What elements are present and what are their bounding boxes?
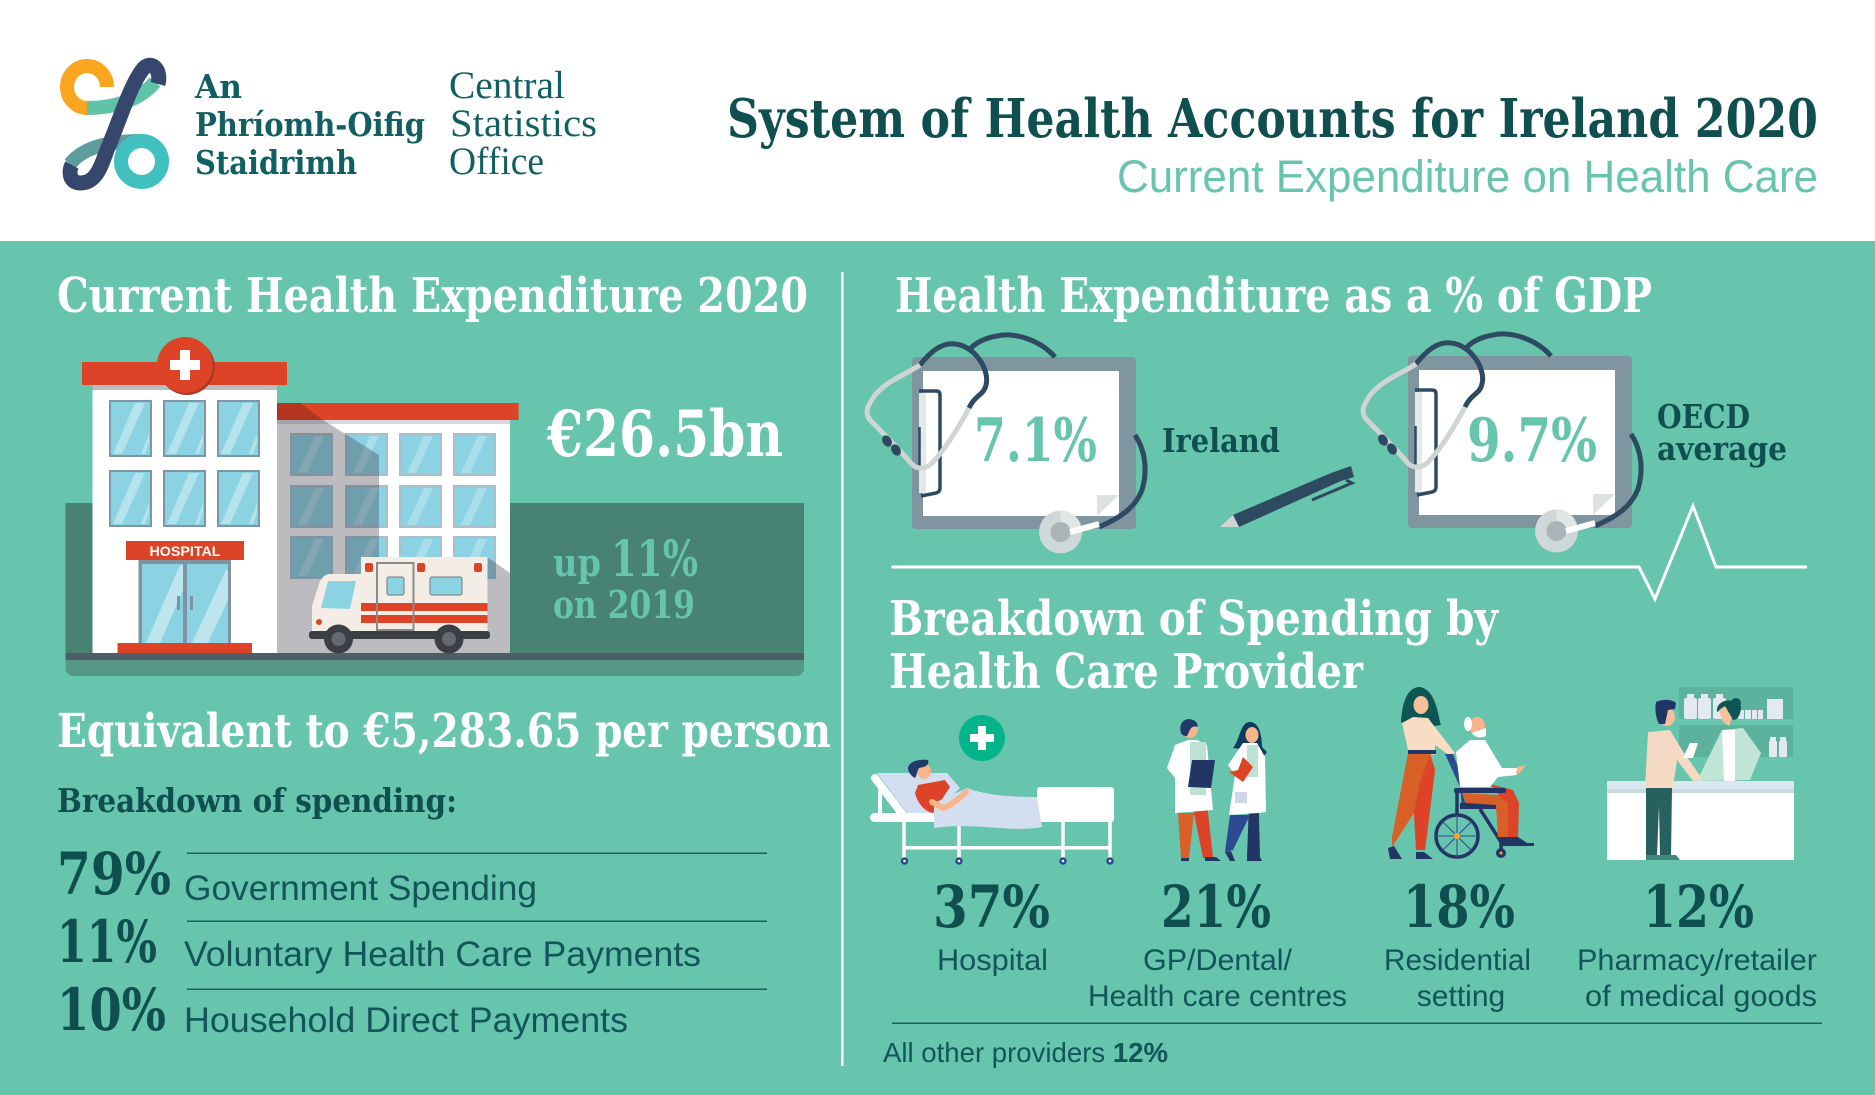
icon: clipboard Ireland [867, 335, 1145, 554]
provider: GP, dental, health care centres [1088, 719, 1347, 1013]
icon: carer and wheelchair [1388, 687, 1534, 859]
item: household payments [57, 976, 628, 1044]
page background [0, 0, 1875, 241]
icon: pharmacy counter [1607, 687, 1794, 860]
note: all other providers: All other providers 12% [883, 1037, 1168, 1068]
figure: up 11% on 2019: on 2019 [553, 582, 695, 627]
icon: doctors [1167, 719, 1267, 861]
list: breakdown of spending [57, 840, 767, 1044]
illustration: hospital and ambulance [66, 337, 804, 676]
logo: Central Statistics Office [67, 64, 597, 183]
item: voluntary payments [57, 908, 701, 976]
heading: breakdown by provider: Health Care Provider [889, 644, 1364, 700]
figure: Ireland 7.1%: 7.1% [974, 406, 1097, 476]
figure: up 11% on 2019 [553, 529, 698, 627]
label: GP/Dental/Health care centres: Health care centres [1088, 980, 1347, 1013]
panel: expenditure as a share of GDP [867, 268, 1807, 599]
figure: up 11% on 2019: 11% [611, 529, 698, 588]
panel: breakdown by provider [870, 591, 1822, 1068]
figure: 21%: 21% [1161, 873, 1271, 941]
label: Pharmacy/retailer of medical goods: of medical goods [1585, 980, 1817, 1013]
figure: 18%: 18% [1403, 873, 1515, 941]
logo Irish name [194, 67, 425, 182]
label: GP/Dental/Health care centres: GP/Dental/ [1143, 944, 1293, 977]
item: government spending: Government Spending [184, 869, 537, 908]
item: government spending: 79% [57, 840, 171, 908]
logo Irish name: Phríomh-Oifig [195, 105, 425, 144]
item: voluntary payments: Voluntary Health Care Payments [184, 935, 701, 974]
label: Residential setting: setting [1417, 980, 1505, 1013]
provider: hospital [870, 715, 1114, 977]
label: Pharmacy/retailer of medical goods [1577, 944, 1817, 1013]
logo English name: Office [449, 140, 544, 183]
second hospital block [277, 403, 519, 653]
heading: current health expenditure: Current Health Expenditure 2020 [57, 268, 808, 324]
label: Hospital: Hospital [937, 944, 1048, 977]
figure: 12%: 12% [1643, 873, 1754, 941]
figure: OECD 9.7%: 9.7% [1467, 406, 1597, 476]
label: OECD average [1657, 397, 1787, 468]
column divider [841, 272, 844, 1066]
label: GP/Dental/Health care centres [1088, 944, 1347, 1013]
logo Irish name: An [194, 67, 242, 106]
item: household payments: Household Direct Payments [184, 1001, 628, 1040]
subtitle: Current Expenditure on Health Care [1117, 151, 1818, 202]
icon: clipboard OECD [1363, 334, 1641, 552]
ambulance [309, 557, 490, 654]
main hospital block [82, 337, 287, 653]
ground band [66, 503, 804, 676]
heading: GDP: Health Expenditure as a % of GDP [895, 268, 1652, 324]
logo Irish name: Staidrimh [195, 143, 357, 182]
heading: breakdown by provider: Breakdown of Spending by [889, 591, 1500, 647]
label: OECD average: OECD [1657, 397, 1750, 436]
logo English name: Statistics [450, 102, 597, 145]
item: voluntary payments: 11% [57, 908, 157, 976]
item: government spending [57, 840, 537, 908]
logo English name: Central [449, 64, 565, 107]
panel: current health expenditure [57, 268, 831, 1044]
figure: 37%: 37% [933, 873, 1050, 941]
logo mark [67, 65, 162, 183]
label: Pharmacy/retailer of medical goods: Pharmacy/retailer [1577, 944, 1817, 977]
label: OECD average: average [1657, 429, 1787, 468]
heading: breakdown by provider [889, 591, 1500, 700]
main hospital block: HOSPITAL [150, 543, 221, 559]
provider: pharmacy [1577, 687, 1817, 1013]
figure: total 26.5bn: €26.5bn [546, 397, 783, 472]
heading: equivalent per person: Equivalent to €5,283.65 per person [57, 704, 831, 759]
label: Residential setting: Residential [1384, 944, 1531, 977]
icon: pen [1220, 466, 1354, 527]
heading: breakdown of spending: Breakdown of spending: [57, 781, 457, 820]
logo English name [449, 64, 597, 183]
figure: up 11% on 2019: up [553, 540, 601, 585]
panel: main teal background [0, 241, 1875, 1095]
icon: hospital bed [870, 715, 1114, 864]
provider: residential setting [1384, 687, 1534, 1013]
label: Residential setting [1384, 944, 1531, 1013]
heartbeat line [892, 506, 1807, 599]
item: household payments: 10% [57, 976, 166, 1044]
label: Ireland: Ireland [1162, 421, 1280, 460]
